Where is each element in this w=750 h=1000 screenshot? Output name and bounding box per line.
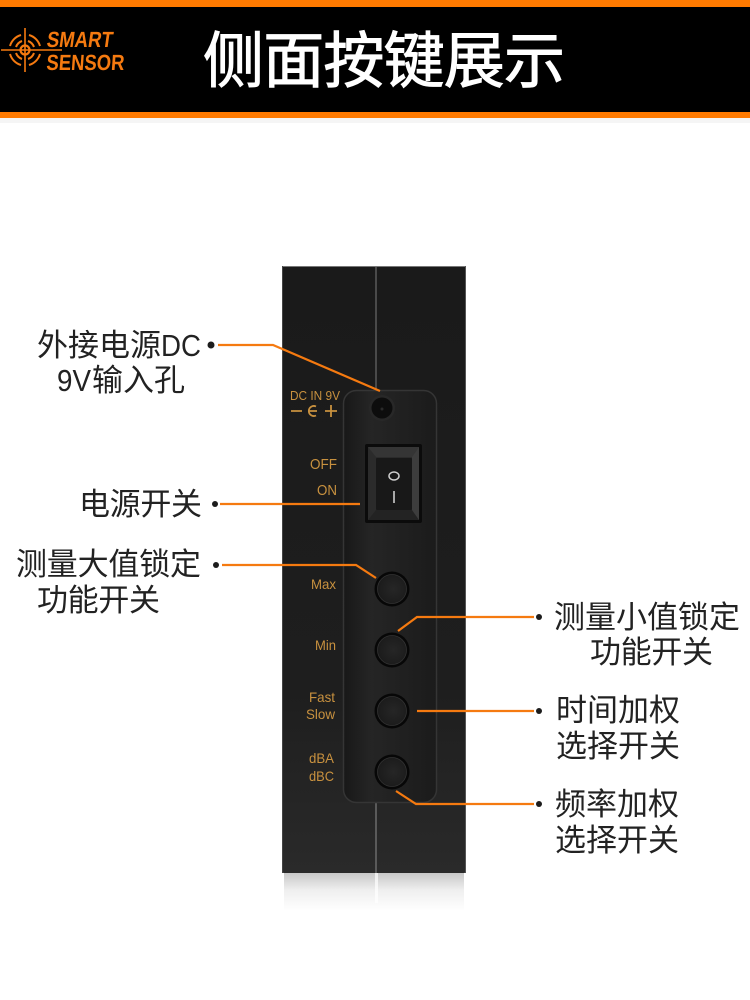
button: Min (374, 632, 410, 668)
callout: frequency weighting (396, 787, 679, 858)
device reflection (284, 873, 464, 911)
DC input jack (369, 395, 395, 421)
callout: frequency weighting: 频率加权 (555, 787, 679, 822)
logo text: SMART (45, 27, 115, 52)
device: side panel of meter (282, 266, 466, 873)
callout: max hold: 功能开关 (37, 583, 160, 618)
callout: max hold: 测量大值锁定 (16, 547, 201, 582)
icon: crosshair target (1, 28, 62, 72)
callout: min hold (398, 600, 740, 670)
callout: time weighting: 选择开关 (556, 729, 680, 764)
switch labels: ON (317, 482, 337, 499)
logo: Smart Sensor (1, 27, 125, 75)
logo text (45, 27, 125, 75)
callout: power switch (79, 487, 360, 522)
header banner (0, 0, 750, 123)
logo text: SENSOR (46, 50, 125, 75)
callout: min hold: 测量小值锁定 (554, 600, 740, 635)
callout: DC input (37, 328, 380, 398)
button labels: Fast (309, 689, 335, 705)
device body (282, 266, 466, 873)
button: dBA/dBC (374, 754, 410, 790)
button: Max (374, 572, 410, 606)
callout: time weighting (417, 693, 680, 764)
DC in label: DC IN 9V (290, 388, 340, 403)
title: 侧面按键展示 (203, 27, 565, 95)
buttons (374, 572, 410, 790)
rocker switch (365, 444, 422, 523)
button labels: Min (315, 637, 336, 653)
switch labels (310, 456, 337, 499)
button labels: Max (311, 576, 336, 592)
button labels: dBA (309, 750, 335, 766)
callout: DC input: 输入孔 (92, 363, 185, 398)
button labels: dBC (309, 768, 334, 784)
callout: time weighting: 时间加权 (556, 693, 680, 728)
callout: max hold (16, 547, 376, 618)
control plate (344, 390, 436, 802)
callout: DC input: 外接电源 (37, 328, 161, 363)
callout: DC input: 9V (57, 363, 91, 398)
switch labels: OFF (310, 456, 337, 473)
button labels (306, 576, 336, 784)
callout: power switch: 电源开关 (79, 487, 202, 522)
button labels: Slow (306, 706, 336, 722)
DC in label (290, 388, 340, 417)
callout: min hold: 功能开关 (590, 635, 713, 670)
button: Fast/Slow (374, 694, 410, 728)
callout: DC input: DC (161, 328, 201, 363)
callout: frequency weighting: 选择开关 (555, 823, 679, 858)
